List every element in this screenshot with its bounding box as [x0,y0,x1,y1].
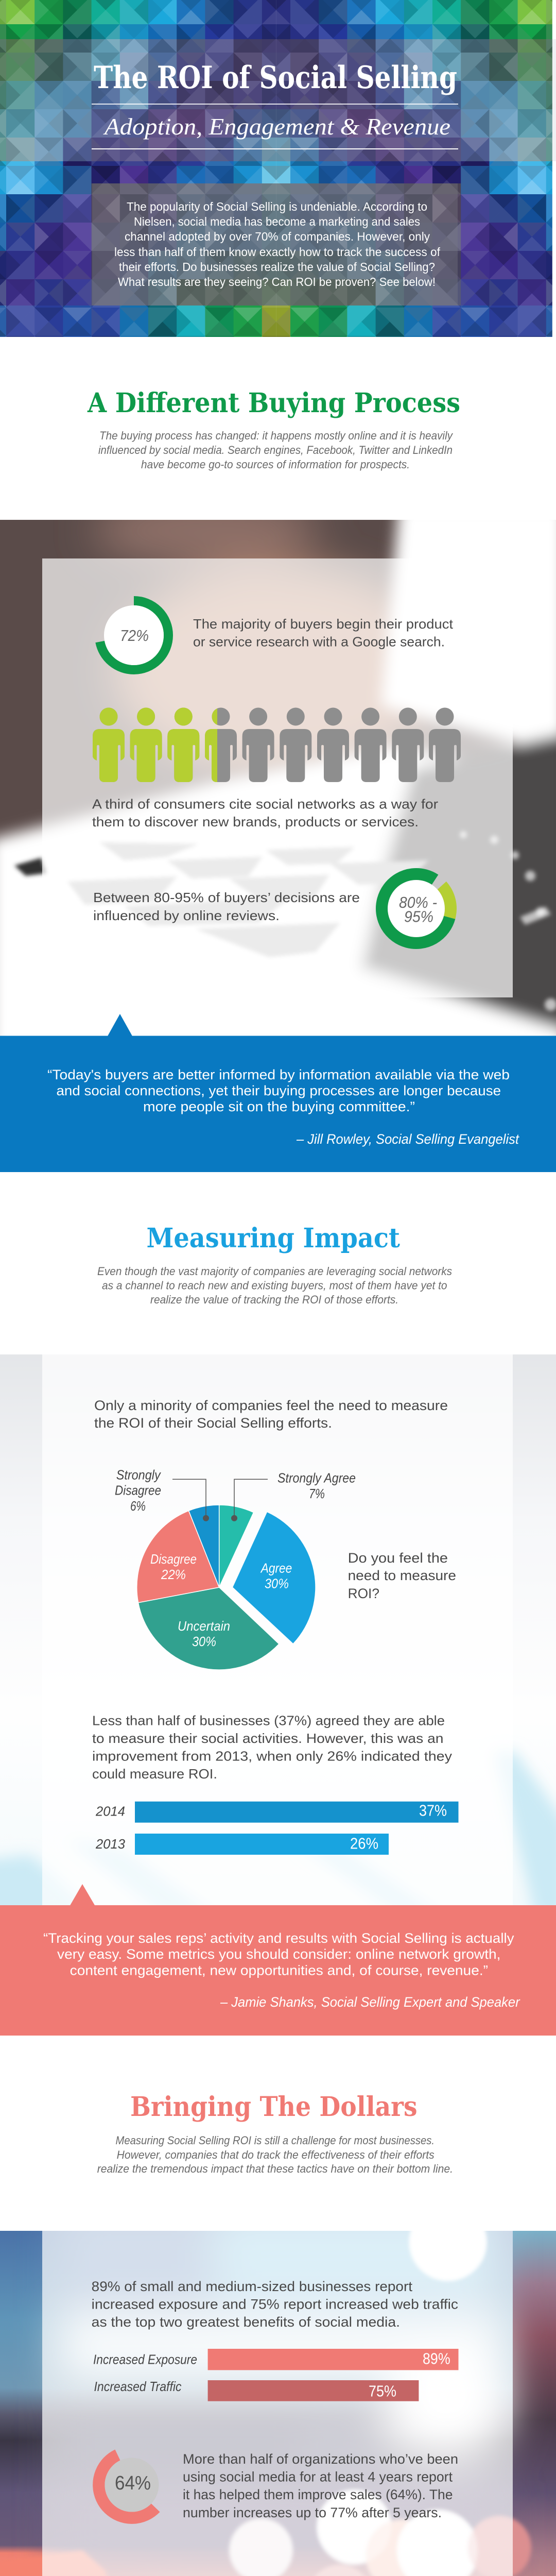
section intro: buying process: The buying process has changed: it happens mostly online and it is heavily [99,429,454,442]
pie chart: measure ROI survey: Strongly [116,1467,161,1483]
text: exposure and traffic: 89% of small and medium-sized businesses report [92,2279,413,2294]
bar chart: benefits: 75% [369,2382,396,2400]
pie chart: measure ROI survey: 6% [130,1498,146,1514]
text: exposure and traffic [92,2279,458,2330]
pie question [349,1553,456,1598]
heading: bringing the dollars: Bringing The Dollars [130,2091,418,2123]
bar chart: measuring ROI by year: 26% [350,1834,378,1853]
intro text block: What results are they seeing? Can ROI be proven? See below! [118,275,436,289]
quote band: jill rowley [0,1014,556,1172]
intro text block: The popularity of Social Selling is undeniable. According to [127,200,427,213]
donut: 72% [99,601,168,670]
text: online reviews: influenced by online reviews. [93,908,280,923]
text: minority of companies [94,1398,448,1431]
pie chart: measure ROI survey: Disagree [115,1483,161,1498]
quote band: jamie shanks: very easy. Some metrics you should consider: online network growth, [57,1946,500,1962]
section intro: bringing the dollars: Measuring Social Selling ROI is still a challenge for most businesses. [115,2134,435,2147]
bar chart: benefits: 89% [423,2349,450,2367]
section intro: bringing the dollars: realize the tremendous impact that these tactics have on their bottom line. [97,2162,453,2175]
title: The ROI of Social Selling [94,60,457,96]
bar chart: measuring ROI by year [95,1802,458,1855]
subtitle: Adoption, Engagement & Revenue [103,113,450,140]
pie question: ROI? [348,1586,379,1601]
pie chart: measure ROI survey: 22% [161,1567,186,1582]
quote band: jill rowley: – Jill Rowley, Social Selling Evangelist [296,1131,519,1147]
donut: 80% - 95%: 95% [404,908,433,925]
donut: 80% - 95% [376,868,457,949]
panel: buying process photo background [0,495,556,1051]
text: google search: The majority of buyers begin their product [193,616,454,632]
pie chart: measure ROI survey: Agree [260,1561,292,1576]
quote band: jamie shanks [0,1884,556,2036]
intro text block: less than half of them know exactly how to track the success of [114,245,441,259]
heading: measuring impact: Measuring Impact [146,1223,400,1254]
section intro: measuring impact: realize the value of tracking the ROI of those efforts. [150,1293,398,1306]
pie question: need to measure [348,1568,456,1583]
text: improved sales: it has helped them improve sales (64%). The [183,2487,453,2502]
intro text block: their efforts. Do businesses realize the value of Social Selling? [119,260,435,274]
pie chart: measure ROI survey [115,1467,356,1670]
quote band: jamie shanks: “Tracking your sales reps’ activity and results with Social Selling is actually [43,1930,514,1946]
text: less than half of businesses: to measure their social activities. However, this was an [92,1731,444,1746]
text: social networks discovery [92,796,438,829]
pie question: Do you feel the [348,1550,448,1566]
section intro: measuring impact: Even though the vast majority of companies are leveraging social networks [97,1265,452,1278]
text: social networks discovery: them to discover new brands, products or services. [92,814,419,829]
text: minority of companies: Only a minority of companies feel the need to measure [94,1398,448,1413]
panel: bringing the dollars photo background [0,2204,556,2576]
text: exposure and traffic: as the top two greatest benefits of social media. [92,2314,400,2330]
donut: 64%: 64% [115,2472,151,2494]
bar chart: measuring ROI by year: 2014 [95,1804,125,1819]
pie chart: measure ROI survey: Strongly Agree [277,1470,356,1486]
text: less than half of businesses: improvement from 2013, when only 26% indicated they [92,1749,452,1764]
pie chart: measure ROI survey: Disagree [150,1551,197,1567]
section intro: measuring impact: as a channel to reach new and existing buyers, most of them have yet to [102,1279,447,1292]
section intro: buying process: have become go-to sources of information for prospects. [141,458,410,471]
section intro: bringing the dollars [97,2134,453,2175]
pie chart: measure ROI survey: 30% [192,1634,216,1649]
section intro: measuring impact [97,1265,452,1306]
intro text block: channel adopted by over 70% of companies. However, only [125,230,430,243]
pie chart: measure ROI survey: Uncertain [178,1618,230,1634]
text: improved sales: More than half of organizations who’ve been [183,2451,458,2467]
text: exposure and traffic: increased exposure and 75% report increased web traffic [92,2297,458,2312]
pie chart: measure ROI survey: 30% [265,1576,289,1591]
pie chart: measure ROI survey: 7% [309,1486,325,1501]
text: improved sales [183,2451,458,2520]
quote band: jill rowley: “Today's buyers are better informed by information available via the web [47,1067,510,1082]
quote band: jill rowley: and social connections, yet their buying processes are longer because [57,1083,501,1098]
text: less than half of businesses: Less than half of businesses (37%) agreed they are able [92,1713,445,1728]
text: improved sales: number increases up to 77% after 5 years. [183,2505,442,2520]
quote band: jamie shanks: – Jamie Shanks, Social Selling Expert and Speaker [220,1994,520,2010]
section intro: buying process: influenced by social media. Search engines, Facebook, Twitter and LinkedIn [98,444,453,456]
donut: 72%: 72% [120,626,149,645]
donut: 80% - 95%: 80% - [399,893,437,911]
text: less than half of businesses [92,1713,452,1782]
intro text block [114,200,441,289]
text: social networks discovery: A third of consumers cite social networks as a way for [92,796,438,812]
text: google search: or service research with a Google search. [193,634,445,649]
bar chart: measuring ROI by year: 2013 [95,1836,126,1852]
icon row: one third of people [93,708,461,782]
section intro: buying process [98,429,454,471]
heading: a different buying process: A Different Buying Process [87,387,460,419]
intro text block: Nielsen, social media has become a marketing and sales [134,215,420,228]
text: online reviews: Between 80-95% of buyers’ decisions are [93,890,360,905]
bar chart: measuring ROI by year: 37% [419,1802,447,1820]
text: less than half of businesses: could measure ROI. [92,1766,217,1782]
header mosaic banner [0,0,556,337]
section intro: bringing the dollars: However, companies that do track the effectiveness of their efforts [117,2148,435,2161]
bar chart: benefits: Increased Traffic [94,2379,181,2394]
bar chart: benefits: Increased Exposure [93,2351,197,2367]
panel: measuring impact background [0,1354,556,1917]
text: improved sales: using social media for at least 4 years report [183,2469,453,2484]
text: minority of companies: the ROI of their Social Selling efforts. [94,1415,332,1431]
quote band: jamie shanks: content engagement, new opportunities and, of course, revenue.” [70,1962,488,1978]
text: google search [193,616,454,649]
donut: 64% [85,2438,179,2532]
text: online reviews [93,890,360,923]
bar chart: benefits [93,2349,458,2401]
quote band: jill rowley: more people sit on the buying committee.” [143,1099,415,1114]
